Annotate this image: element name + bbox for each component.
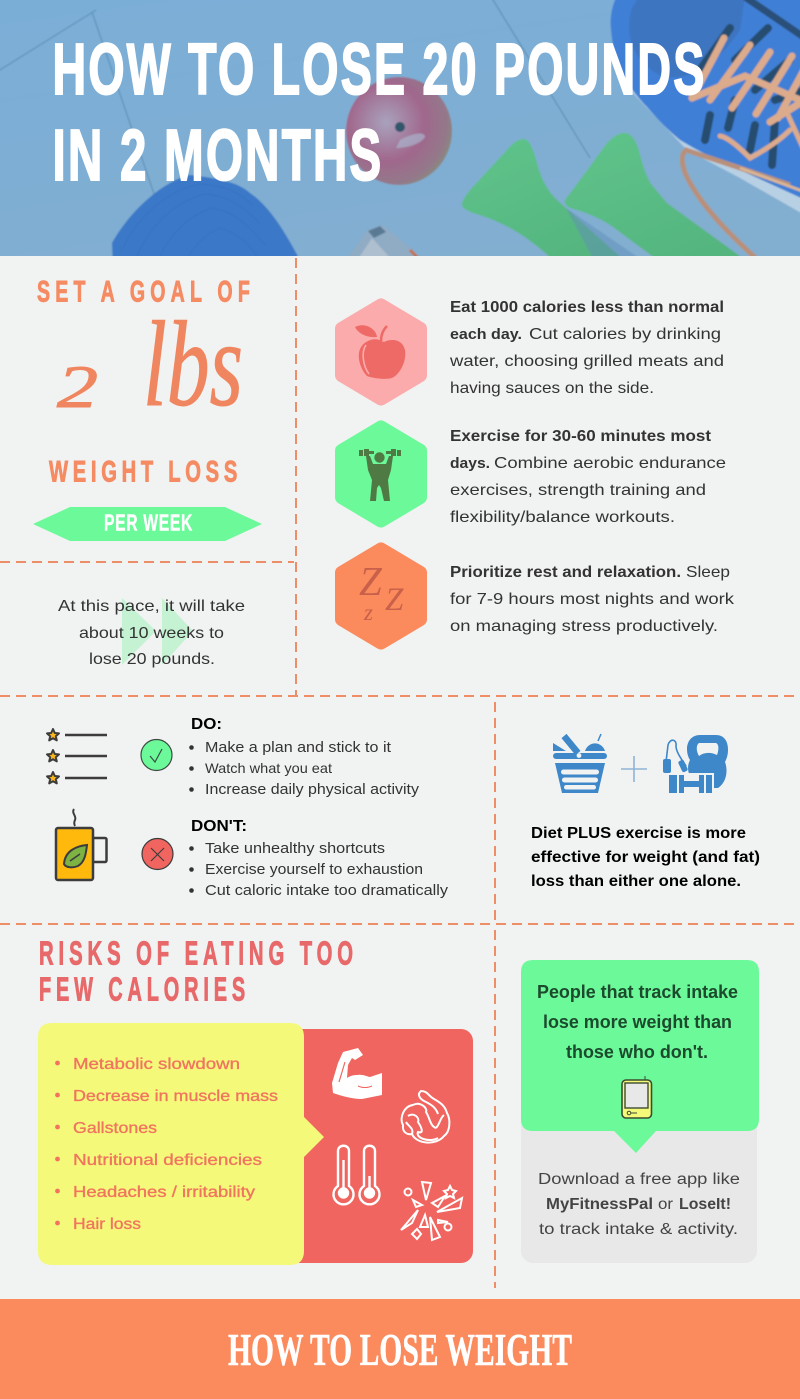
panel: weekly goal [33,276,262,541]
habit text: eat less: Eat 1000 calories less than normal [450,299,724,316]
gray download card: LoseIt! [679,1196,731,1213]
ribbon: per week: PER WEEK [104,510,193,536]
heading: risks [39,934,358,1008]
yellow risks list: Gallstones [73,1120,157,1137]
panel: time estimate [58,598,245,668]
habit text: exercise: flexibility/balance workouts. [450,509,675,526]
water bottle [350,226,414,256]
time estimate text: At this pace, it will take [58,598,245,615]
icon: food basket [553,734,607,793]
diet plus exercise text: effective for weight (and fat) [531,849,760,866]
yellow risks list: Metabolic slowdown [73,1056,240,1073]
habit text: exercise: exercises, strength training and [450,482,706,499]
green dumbbells [462,139,626,262]
icon: sleep hexagon: Z [385,582,404,618]
habit text: rest: Prioritize rest and relaxation. [450,564,681,581]
gray download card: or [658,1196,673,1213]
footer title: HOW TO LOSE WEIGHT [228,1324,572,1375]
panel: do and don't [47,716,449,899]
don't list [189,818,449,899]
don't list: Cut caloric intake too dramatically [205,883,449,899]
green callout [521,960,759,1153]
gray download card: MyFitnessPal [546,1196,653,1213]
icon: sleep hexagon: Z [359,558,383,604]
icon: kettlebell, rope and dumbbell [663,735,728,795]
title: IN 2 MONTHS [52,116,384,196]
habit text: eat less: water, choosing grilled meats and [449,353,724,370]
habit text: exercise: Exercise for 30-60 minutes most [450,428,712,445]
time estimate text: about 10 weeks to [79,625,224,642]
habit text: exercise: days. [450,455,490,472]
green callout: those who don't. [566,1041,708,1062]
do list: Watch what you eat [205,760,332,776]
panel: risks of eating too few calories [38,934,473,1265]
habit text: eat less: Cut calories by drinking [529,326,721,343]
don't list: Take unhealthy shortcuts [205,841,385,857]
gray download card: Download a free app like [538,1171,740,1188]
habit text: eat less: each day. [450,326,522,343]
sneaker [632,88,800,213]
icon: weightlifter hexagon [342,428,420,520]
icon: tea mug [56,809,106,880]
hero banner [0,0,800,280]
heading: weight loss: WEIGHT LOSS [49,456,242,488]
heading: risks: FEW CALORIES [39,970,250,1008]
icon: sleep hexagon [342,550,420,642]
habit text: eat less: having sauces on the side. [450,380,654,397]
don't list: Exercise yourself to exhaustion [205,862,423,878]
habit text: exercise: Combine aerobic endurance [494,455,726,472]
icon: starred checklist [47,729,107,783]
time estimate text: lose 20 pounds. [89,651,215,668]
gray download card: to track intake & activity. [539,1221,738,1238]
gray download card [521,1110,757,1263]
diet plus exercise text: Diet PLUS exercise is more [531,825,746,842]
habit text: rest [450,564,735,635]
panel: diet plus exercise [531,734,760,890]
dashed section dividers [0,258,800,1288]
icon: check circle [141,740,172,770]
habit text: eat less [449,299,724,397]
diet plus exercise text: loss than either one alone. [531,873,741,890]
habit text: rest: on managing stress productively. [450,618,718,635]
do list [189,716,420,798]
heading: set a goal of: SET A GOAL OF [37,276,255,308]
hero photo: fitness items on a floor [0,0,800,280]
yellow risks list: Headaches / irritability [73,1184,255,1201]
time estimate text [58,598,245,668]
yellow risks list: Hair loss [73,1216,141,1233]
habit text: rest: Sleep [686,564,730,581]
title [54,42,704,182]
diet plus exercise text [531,825,760,890]
icon: sleep hexagon: z [363,600,373,625]
don't list: DON'T: [191,818,247,835]
yoga mat [112,174,298,256]
green callout: People that track intake [537,981,738,1002]
do list: DO: [191,716,222,733]
goal number: 2 lbs: lbs [143,297,243,432]
icon: thermometers [333,1146,380,1204]
panel: track intake [521,960,759,1263]
heading: risks: RISKS OF EATING TOO [39,934,358,972]
green callout: lose more weight than [543,1011,732,1032]
red icon panel [280,1029,473,1263]
yellow risks list: Nutritional deficiencies [73,1152,262,1169]
panel: three habits [342,299,735,642]
icon: intestines [402,1091,449,1143]
icon: fast-forward arrows [122,598,193,665]
icon: flexed arm [332,1048,382,1099]
yellow risks list: Decrease in muscle mass [73,1088,278,1105]
footer band [0,1299,800,1399]
habit text: rest: for 7-9 hours most nights and work [450,591,735,608]
do list: Make a plan and stick to it [205,740,391,756]
do list: Increase daily physical activity [205,782,420,798]
icon: cross circle [142,838,173,870]
ribbon: per week [33,507,262,541]
goal number: 2 lbs: 2 [57,354,98,420]
icon: plus sign [621,756,647,782]
icon: phone [622,1076,652,1118]
goal number: 2 lbs [57,297,243,432]
yellow risks list [38,1023,324,1265]
habit text: exercise [450,428,726,526]
icon: apple hexagon [342,306,420,398]
icon: burst [401,1182,462,1240]
apple [346,77,452,185]
